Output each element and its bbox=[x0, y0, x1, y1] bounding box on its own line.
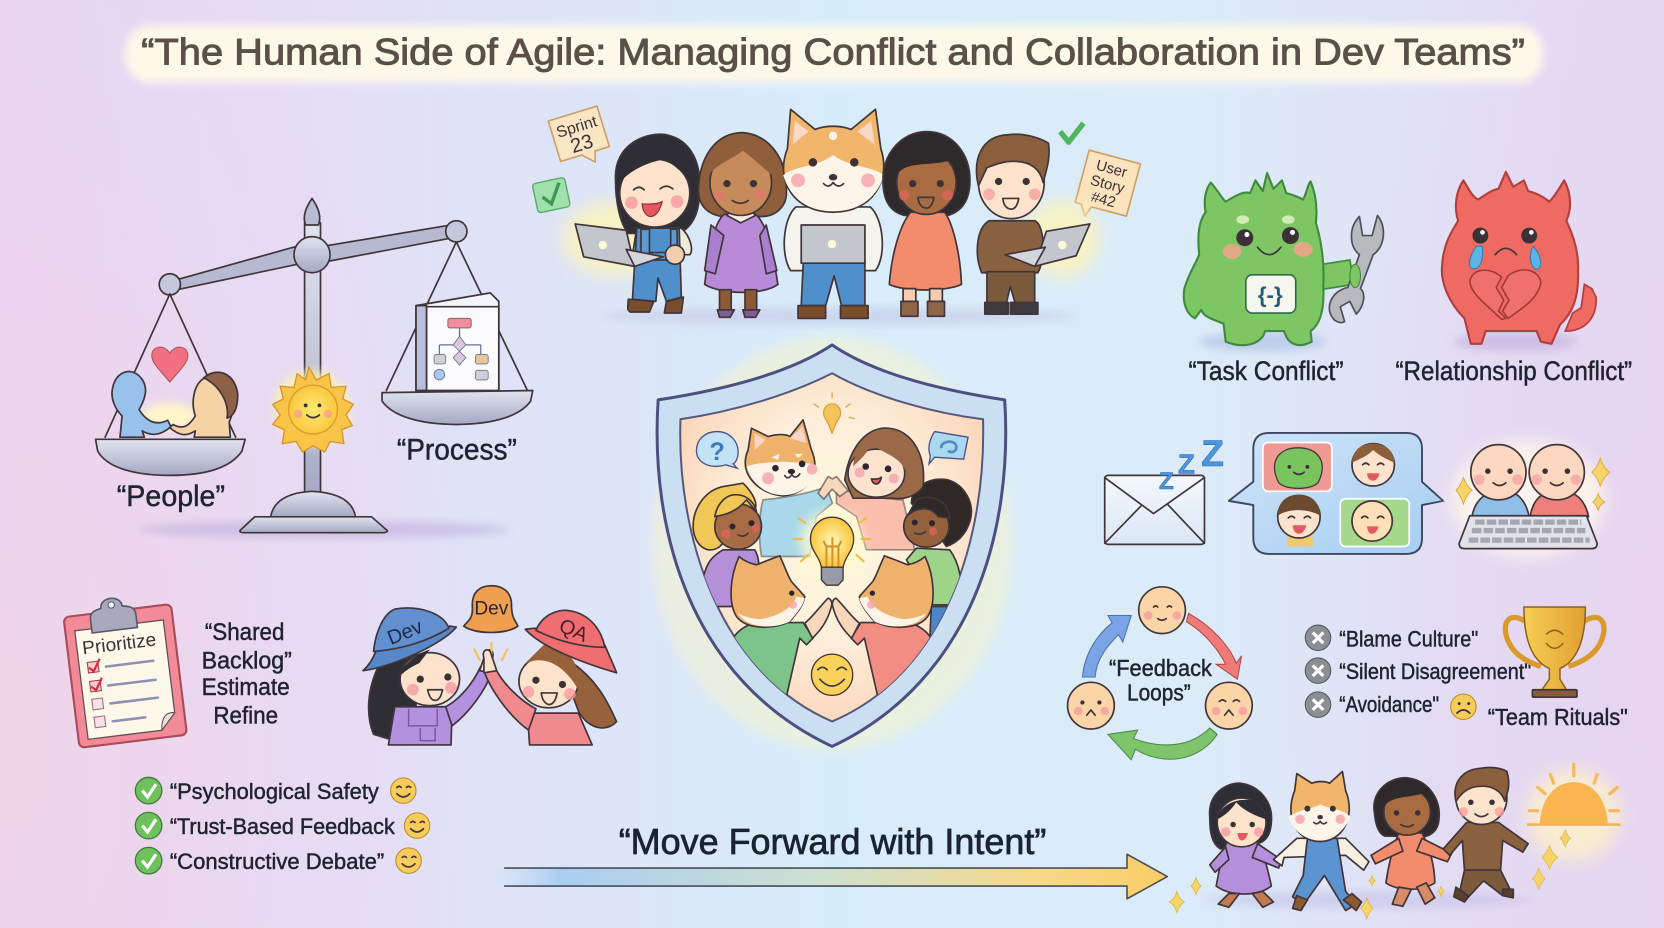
green monster: task conflict: {-} bbox=[1258, 282, 1283, 307]
item: blame culture bbox=[1305, 625, 1478, 651]
scale stand bbox=[159, 198, 467, 533]
arrow: blue bbox=[1082, 615, 1131, 677]
item: silent disagreement: “Silent Disagreement" bbox=[1339, 659, 1531, 684]
call tile: green monster bbox=[1263, 443, 1332, 491]
zzz letters: Z bbox=[1201, 432, 1224, 474]
label: feedback loops: “Feedback bbox=[1109, 655, 1212, 681]
check bubble bbox=[532, 177, 570, 213]
item: blame culture: “Blame Culture" bbox=[1339, 626, 1478, 651]
hat: Dev bbox=[384, 616, 427, 650]
label: process: “Process” bbox=[397, 433, 517, 466]
label: people: “People” bbox=[117, 480, 225, 513]
item: avoidance bbox=[1305, 692, 1476, 719]
label: task conflict: “Task Conflict” bbox=[1189, 356, 1343, 386]
icon: smiling sun bbox=[273, 367, 353, 452]
process book with flowchart bbox=[416, 293, 499, 391]
label: team rituals: “Team Rituals" bbox=[1488, 704, 1628, 730]
walker: girl bbox=[1210, 783, 1281, 907]
check bbox=[1060, 123, 1083, 142]
title: “The Human Side of Agile: Managing Conflict and Collaboration in Dev Teams” bbox=[141, 31, 1525, 73]
sprint tag: Sprint bbox=[555, 113, 600, 142]
face: right bbox=[1206, 682, 1252, 729]
video call bubble bbox=[1229, 433, 1443, 554]
call tile: man bbox=[1352, 444, 1394, 486]
icon: smiley bbox=[811, 654, 853, 695]
user story tag bbox=[1072, 150, 1140, 226]
right pan bbox=[382, 391, 533, 424]
face: top bbox=[1139, 587, 1185, 634]
girl with blue dev hat bbox=[363, 608, 493, 745]
walker: dark-skinned girl bbox=[1371, 778, 1452, 906]
back shiba right with red shirt bbox=[832, 556, 933, 696]
face: left bbox=[1068, 682, 1114, 729]
zzz letters: Z bbox=[1178, 448, 1195, 479]
keyboard bbox=[1459, 516, 1597, 549]
arrow: red bbox=[1186, 613, 1242, 679]
label: feedback loops bbox=[1109, 655, 1212, 705]
call tile: shiba bbox=[1340, 499, 1409, 547]
sparks bbox=[474, 643, 507, 660]
strings bbox=[105, 242, 527, 437]
people holding hands with heart bbox=[112, 347, 238, 437]
balance scale: people vs process bbox=[96, 198, 533, 538]
clipboard text: Prioritize bbox=[81, 628, 157, 658]
icon: lightbulb bbox=[794, 510, 870, 585]
sleepy envelope bbox=[1105, 432, 1224, 544]
heading: move forward: “Move Forward with Intent” bbox=[619, 821, 1046, 862]
team member: curly-haired boy bbox=[904, 479, 971, 547]
pair programming at a keyboard bbox=[1452, 441, 1610, 556]
red monster: relationship conflict bbox=[1442, 172, 1596, 351]
person 2: girl in purple dress bbox=[698, 133, 786, 317]
speech bubble: chat bbox=[929, 432, 968, 464]
shared backlog labels: “Shared bbox=[205, 619, 284, 646]
zzz letters bbox=[1159, 432, 1224, 495]
label: relationship conflict: “Relationship Conflict” bbox=[1395, 356, 1632, 386]
title bbox=[125, 25, 1543, 83]
wrench bbox=[1329, 215, 1383, 323]
sprint tag bbox=[548, 106, 612, 172]
team member: blonde girl bbox=[693, 483, 761, 550]
raised hands top bbox=[818, 477, 848, 499]
person 4: girl in orange dress bbox=[883, 132, 970, 316]
item: constructive debate: “Constructive Debate” bbox=[170, 849, 384, 874]
clip bbox=[88, 596, 137, 633]
team member: green shirt body bbox=[906, 548, 962, 605]
shared backlog labels bbox=[202, 619, 292, 730]
checklist bbox=[87, 652, 161, 728]
trophy: team rituals bbox=[1505, 607, 1604, 697]
person 1: girl with overalls bbox=[562, 134, 700, 313]
item: avoidance: “Avoidance" bbox=[1339, 692, 1439, 717]
right programmer bbox=[1529, 445, 1589, 517]
floating dev hat bbox=[464, 586, 518, 632]
team walking toward sunrise bbox=[1169, 764, 1620, 919]
sunrise bbox=[1527, 764, 1620, 862]
team member: shiba head bbox=[745, 420, 819, 496]
girl with red qa hat bbox=[483, 610, 617, 745]
sparkles bbox=[1456, 458, 1610, 510]
shared backlog labels: Estimate bbox=[202, 674, 290, 701]
walker: man bbox=[1443, 767, 1528, 902]
left pan bbox=[96, 439, 245, 475]
team member: purple body bbox=[703, 550, 759, 606]
sprint tag: 23 bbox=[568, 131, 596, 158]
user story tag: User bbox=[1094, 158, 1129, 181]
back shiba left with green shirt bbox=[731, 556, 832, 696]
walker: shiba bbox=[1273, 771, 1369, 910]
icon: small lightbulb bbox=[814, 393, 855, 434]
team member: blue shirt body bbox=[759, 487, 832, 557]
item: trust-based feedback: “Trust-Based Feedback bbox=[170, 814, 396, 839]
kids high-five in role hats bbox=[363, 586, 617, 745]
shield with team around a lightbulb bbox=[652, 337, 1012, 750]
team of five with laptops bbox=[532, 106, 1140, 325]
user story tag: Story bbox=[1089, 173, 1127, 197]
label: feedback loops: Loops” bbox=[1127, 679, 1191, 705]
speech bubble: question: ? bbox=[709, 438, 725, 466]
clipboard: prioritize bbox=[62, 591, 187, 748]
item: psychological safety: “Psychological Safety bbox=[170, 779, 380, 804]
floating dev hat: Dev bbox=[474, 598, 509, 619]
person 5: man with laptop bbox=[977, 134, 1099, 314]
shared backlog labels: Refine bbox=[213, 703, 278, 730]
arrow: green bbox=[1108, 728, 1217, 760]
speech bubble: question bbox=[696, 432, 738, 468]
sparkles bbox=[1169, 830, 1571, 919]
user story tag: #42 bbox=[1089, 189, 1117, 211]
person 3: shiba with laptop bbox=[783, 109, 884, 318]
call tile: child bbox=[1278, 495, 1320, 547]
team member: brunette girl bbox=[845, 428, 924, 499]
left programmer bbox=[1471, 445, 1529, 517]
team member: pink shirt body bbox=[836, 487, 915, 550]
arrow bbox=[493, 854, 1167, 899]
shield frame bbox=[657, 345, 1006, 746]
shield inner panel bbox=[680, 373, 983, 721]
hat: QA bbox=[556, 615, 592, 647]
feedback loops cycle bbox=[1068, 587, 1252, 760]
zzz letters: Z bbox=[1159, 468, 1174, 495]
shared backlog labels: Backlog” bbox=[202, 648, 292, 675]
green monster: task conflict bbox=[1184, 173, 1383, 351]
list: anti-patterns bbox=[1305, 625, 1531, 719]
checklist: positive behaviours bbox=[135, 777, 430, 874]
